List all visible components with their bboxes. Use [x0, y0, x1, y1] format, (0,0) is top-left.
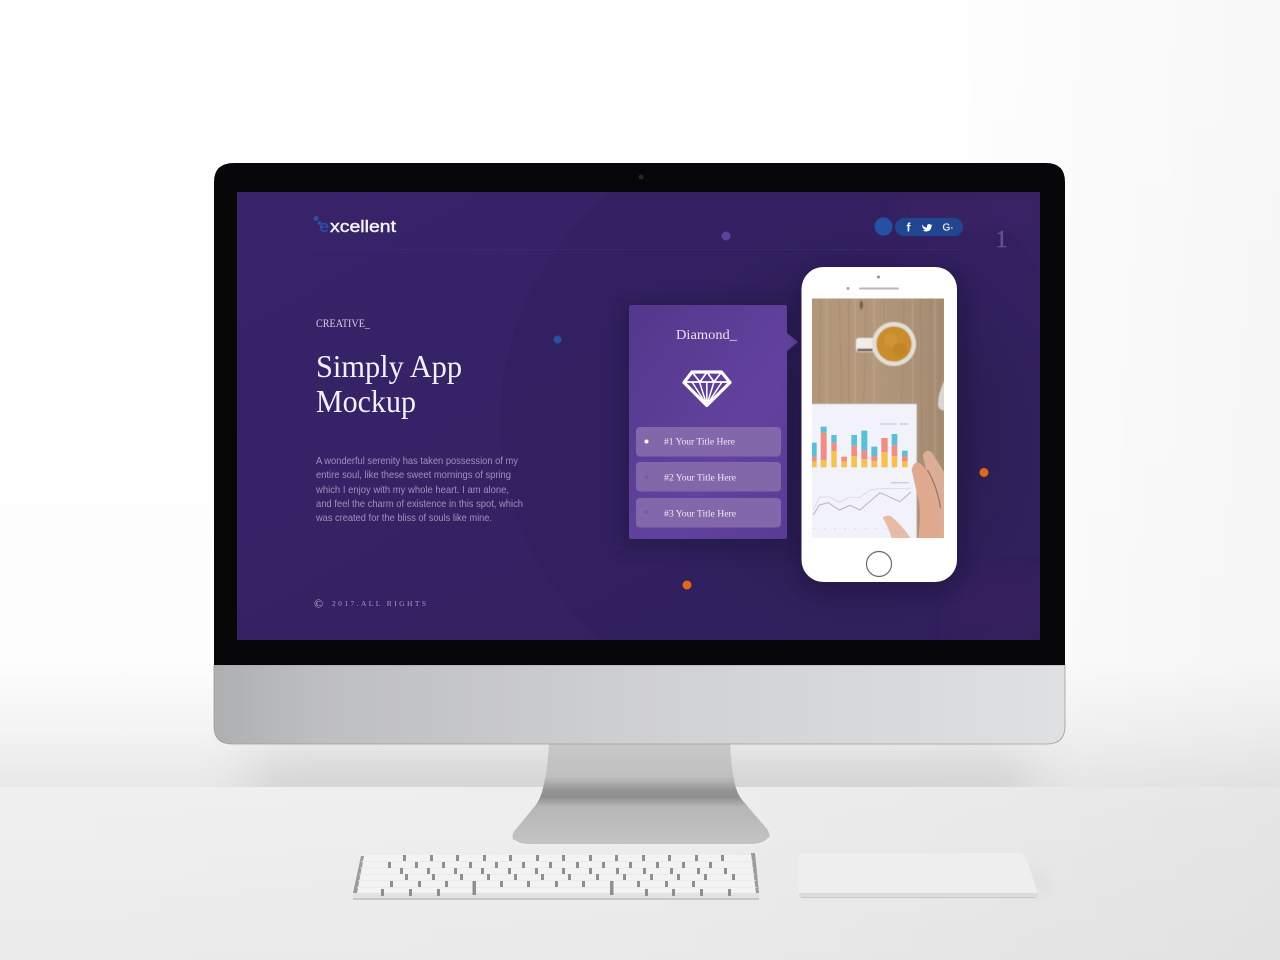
body paragraph: and feel the charm of existence in this spot, which	[316, 498, 523, 510]
social icons: f	[906, 220, 912, 234]
card shadow	[622, 302, 794, 550]
page number: 1	[996, 227, 1008, 253]
list item 3: #3 Your Title Here	[664, 508, 736, 518]
trackpad shadow	[1022, 862, 1050, 896]
phone photo: desk with coffee and charts	[807, 295, 947, 544]
line chart	[813, 488, 911, 529]
logo	[314, 216, 396, 232]
social icons	[874, 218, 963, 236]
monitor chin	[214, 665, 1065, 744]
body paragraph	[315, 455, 523, 524]
card title: Diamond_	[676, 328, 738, 343]
body paragraph: which I enjoy with my whole heart. I am alone,	[315, 484, 509, 496]
list item 2	[636, 462, 781, 492]
heading	[316, 355, 461, 419]
panel: smartphone	[802, 267, 957, 582]
trackpad	[798, 853, 1038, 898]
decorative dots	[554, 232, 988, 590]
logo: xcellent	[330, 217, 396, 236]
social icons: G·	[942, 222, 954, 234]
panel: diamond card	[629, 305, 798, 539]
screen: app slide	[237, 192, 1040, 640]
monitor stand	[512, 743, 770, 845]
copyright: 2017.ALL RIGHTS	[332, 599, 426, 608]
heading: Simply App	[316, 348, 462, 384]
header rule	[555, 249, 962, 250]
monitor bezel	[214, 163, 1065, 665]
icon: diamond	[684, 372, 730, 406]
hand	[883, 451, 945, 538]
logo: e	[320, 217, 329, 236]
body paragraph: A wonderful serenity has taken possession of my	[316, 455, 519, 467]
keyboard key gaps	[357, 855, 757, 896]
list item 3	[636, 498, 781, 528]
keyboard	[353, 853, 759, 900]
background circles	[734, 250, 1012, 576]
phone shadow	[800, 272, 964, 590]
stacked bar chart	[812, 423, 909, 483]
eyebrow label: CREATIVE_	[316, 318, 370, 330]
body paragraph: entire soul, like these sweet mornings of spring	[316, 469, 511, 481]
home button	[866, 552, 892, 576]
heading: Mockup	[316, 383, 416, 419]
list item 1	[636, 427, 781, 456]
body paragraph: was created for the bliss of souls like mine.	[315, 512, 492, 524]
copyright: ©	[314, 596, 323, 610]
list item 1: #1 Your Title Here	[664, 436, 735, 446]
list item 2: #2 Your Title Here	[664, 472, 736, 482]
